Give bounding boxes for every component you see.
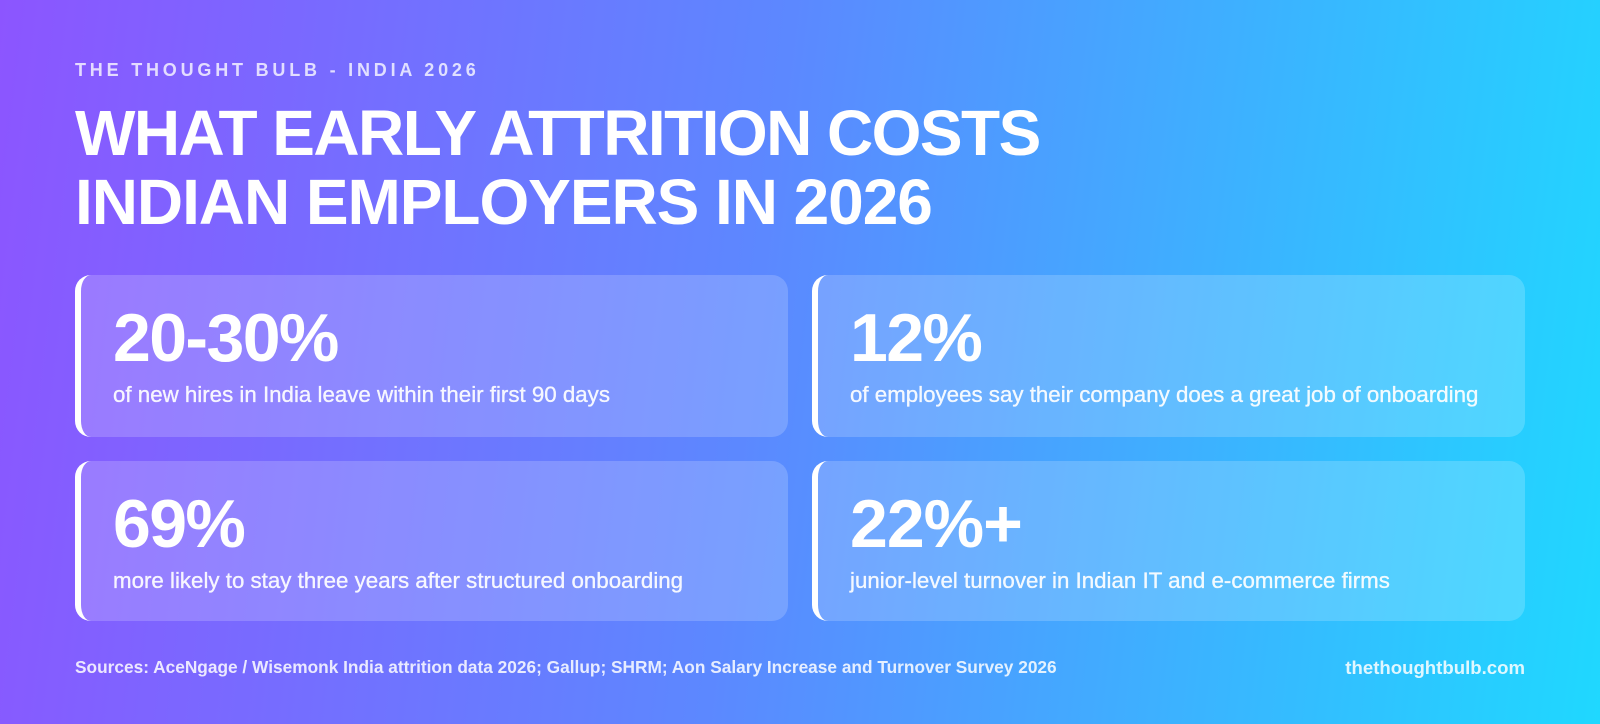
stat description: of employees say their company does a great job of onboarding [850,382,1478,407]
stat description: more likely to stay three years after structured onboarding [113,568,683,593]
panel: 22%+ stat [812,461,1525,621]
title: WHAT EARLY ATTRITION COSTS [75,97,1040,169]
eyebrow: THE THOUGHT BULB - INDIA 2026 [75,60,480,80]
stat number: 12% [850,300,981,376]
title: INDIAN EMPLOYERS IN 2026 [75,166,932,238]
panel: 20-30% stat [75,275,788,437]
panel: 69% stat [75,461,788,621]
title [75,97,1040,238]
stat number: 69% [113,486,244,562]
stat number: 22%+ [850,486,1022,562]
stat number: 20-30% [113,300,338,376]
sources footer: Sources: AceNgage / Wisemonk India attrition data 2026; Gallup; SHRM; Aon Salary Increase and Turnover Survey 2026 [75,657,1057,677]
stat description: of new hires in India leave within their first 90 days [113,382,610,407]
panel: 12% stat [812,275,1525,437]
website: thethoughtbulb.com [1345,657,1525,678]
stat description: junior-level turnover in Indian IT and e-commerce firms [850,568,1390,593]
